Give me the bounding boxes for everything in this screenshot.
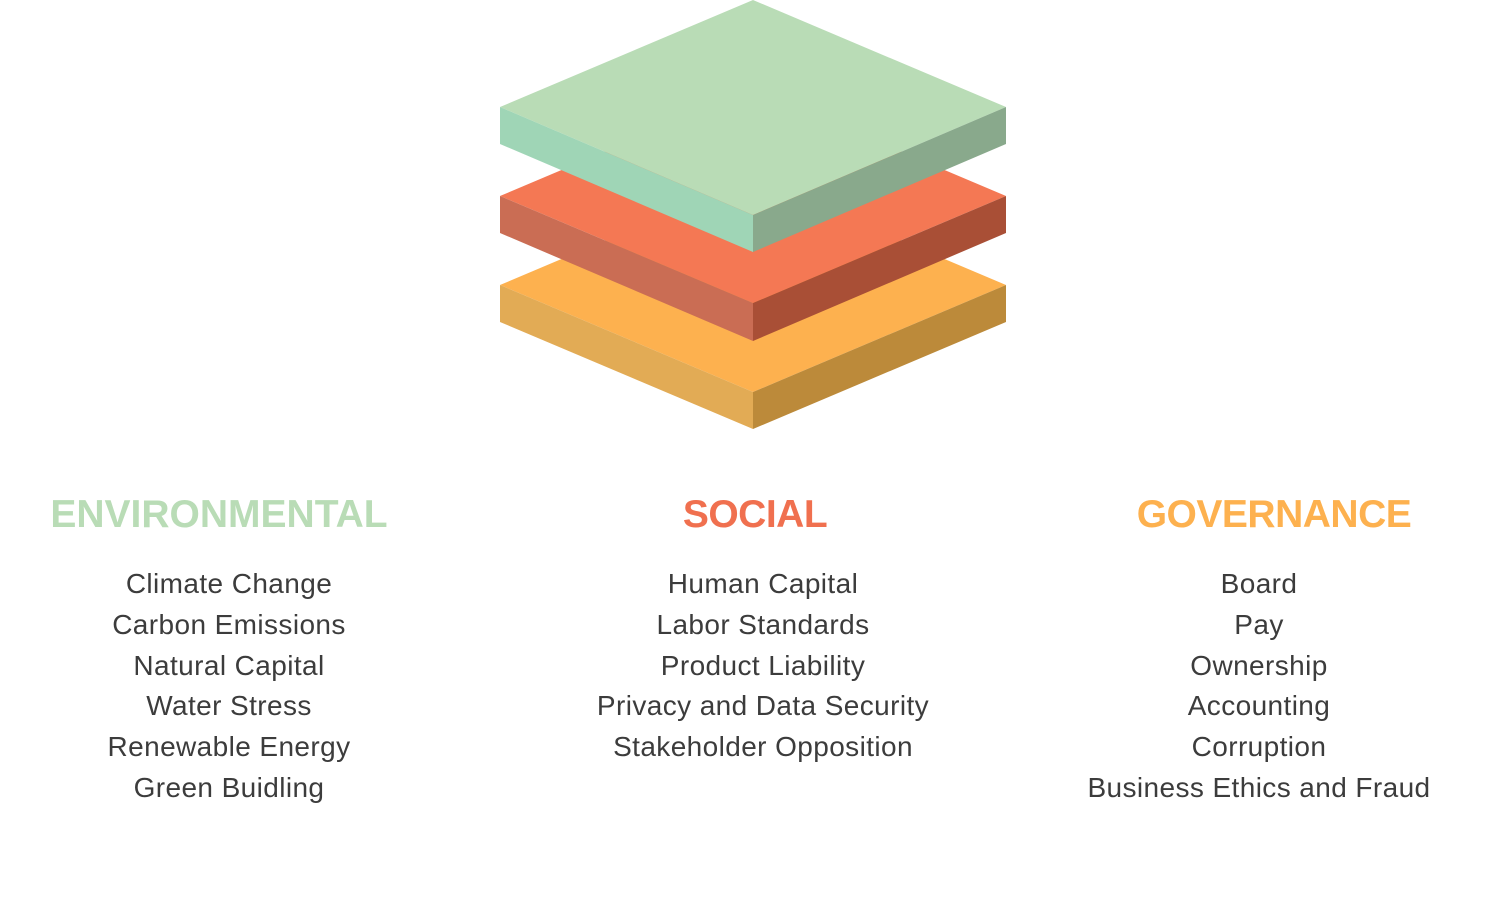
list: environmental topics: Renewable Energy — [108, 731, 350, 762]
layer: governance (orange) — [500, 178, 1006, 429]
list: environmental topics: Carbon Emissions — [112, 609, 346, 640]
list: governance topics: Business Ethics and Fraud — [1087, 772, 1431, 803]
heading: social: SOCIAL — [683, 493, 827, 536]
list: governance topics — [1087, 568, 1431, 803]
list: social topics: Product Liability — [661, 650, 865, 681]
list: governance topics: Pay — [1234, 609, 1284, 640]
heading: governance: GOVERNANCE — [1137, 493, 1411, 536]
list: environmental topics: Climate Change — [126, 568, 332, 599]
list: social topics: Human Capital — [668, 568, 858, 599]
list: environmental topics: Natural Capital — [133, 650, 325, 681]
layer: environmental (green) — [500, 0, 1006, 252]
list: social topics: Labor Standards — [656, 609, 870, 640]
list: governance topics: Board — [1221, 568, 1297, 599]
list: social topics: Privacy and Data Security — [597, 690, 929, 721]
layered stack diagram — [500, 0, 1006, 429]
list: social topics — [597, 568, 929, 762]
list: environmental topics: Water Stress — [146, 690, 312, 721]
list: governance topics: Corruption — [1192, 731, 1326, 762]
heading: environmental: ENVIRONMENTAL — [50, 493, 388, 536]
list: environmental topics — [108, 568, 350, 803]
list: governance topics: Ownership — [1190, 650, 1328, 681]
list: social topics: Stakeholder Opposition — [613, 731, 913, 762]
list: governance topics: Accounting — [1188, 690, 1330, 721]
list: environmental topics: Green Buidling — [134, 772, 324, 803]
layer: social (red) — [500, 89, 1006, 341]
